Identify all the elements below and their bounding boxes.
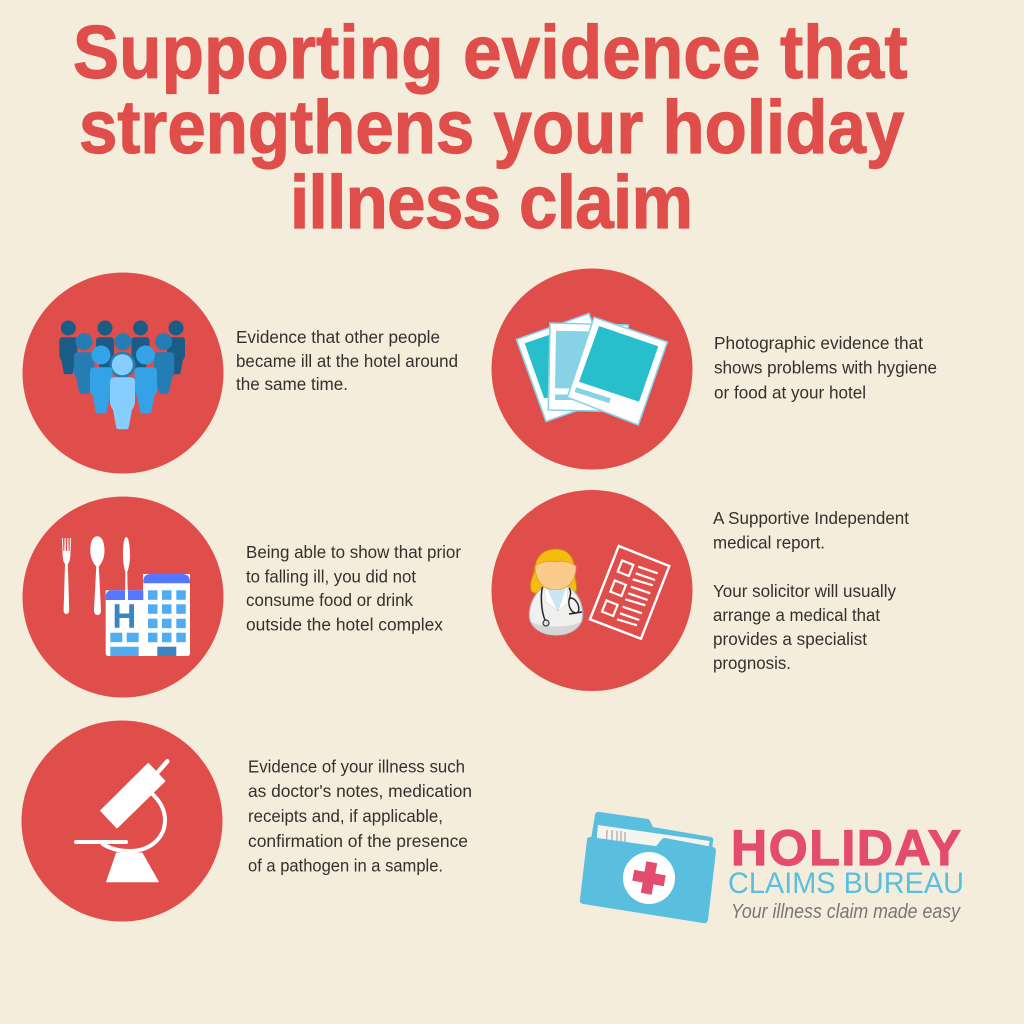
text: photographic evidence: Photographic evidence that	[714, 333, 923, 353]
badge circle	[22, 496, 224, 698]
text: medical report: prognosis.	[713, 653, 791, 673]
text: food and drink	[246, 542, 461, 634]
text: photographic evidence: or food at your hotel	[714, 382, 866, 402]
text: other people	[236, 327, 458, 394]
title: illness claim	[290, 161, 693, 245]
logo wordmark: Your illness claim made easy	[731, 901, 961, 923]
text: medical report	[713, 508, 909, 673]
title: strengthens your holiday	[79, 86, 904, 170]
panel: food and drink	[22, 496, 461, 698]
icon: folder with medical cross	[580, 812, 716, 923]
logo wordmark: HOLIDAY	[731, 820, 961, 876]
text: food and drink: Being able to show that prior	[246, 542, 461, 562]
text: food and drink: consume food or drink	[246, 590, 413, 610]
text: evidence of illness: Evidence of your illness such	[248, 756, 465, 776]
logo: Holiday Claims Bureau	[580, 812, 964, 923]
badge circle	[492, 490, 692, 691]
panel: evidence of illness	[22, 720, 472, 922]
text: evidence of illness: receipts and, if applicable,	[248, 806, 443, 826]
text: medical report: arrange a medical that	[713, 605, 880, 625]
icon: microscope	[76, 761, 167, 882]
badge circle	[22, 720, 222, 922]
text: evidence of illness: of a pathogen in a sample.	[248, 856, 443, 876]
text: medical report: Your solicitor will usually	[713, 581, 896, 601]
text: medical report: medical report.	[713, 532, 825, 552]
text: food and drink: outside the hotel complex	[246, 614, 443, 634]
panel: photographic evidence	[492, 268, 937, 470]
icon: medical report document	[590, 546, 669, 639]
text: medical report: provides a specialist	[713, 629, 867, 649]
text: evidence of illness: as doctor's notes, medication	[248, 781, 472, 801]
icon: photographs	[516, 314, 667, 425]
title	[73, 11, 907, 245]
icon: group of people	[59, 320, 185, 429]
text: evidence of illness	[248, 756, 472, 876]
logo wordmark	[728, 820, 964, 923]
text: other people: Evidence that other people	[236, 327, 440, 347]
panel: other people became ill	[22, 272, 458, 474]
icon: cutlery	[62, 536, 130, 615]
text: other people: the same time.	[236, 374, 348, 394]
text: photographic evidence: shows problems with hygiene	[714, 358, 937, 378]
badge circle	[22, 272, 224, 474]
icon: doctor	[529, 549, 583, 635]
title: Supporting evidence that	[73, 11, 907, 95]
panel: medical report	[492, 490, 909, 691]
text: food and drink: to falling ill, you did not	[246, 566, 416, 586]
text: evidence of illness: confirmation of the presence	[248, 831, 468, 851]
text: medical report: A Supportive Independent	[713, 508, 909, 528]
badge circle	[492, 268, 692, 470]
text: other people: became ill at the hotel around	[236, 351, 458, 371]
icon: hotel	[106, 574, 190, 656]
text: photographic evidence	[714, 333, 937, 402]
logo wordmark: CLAIMS BUREAU	[728, 867, 964, 900]
